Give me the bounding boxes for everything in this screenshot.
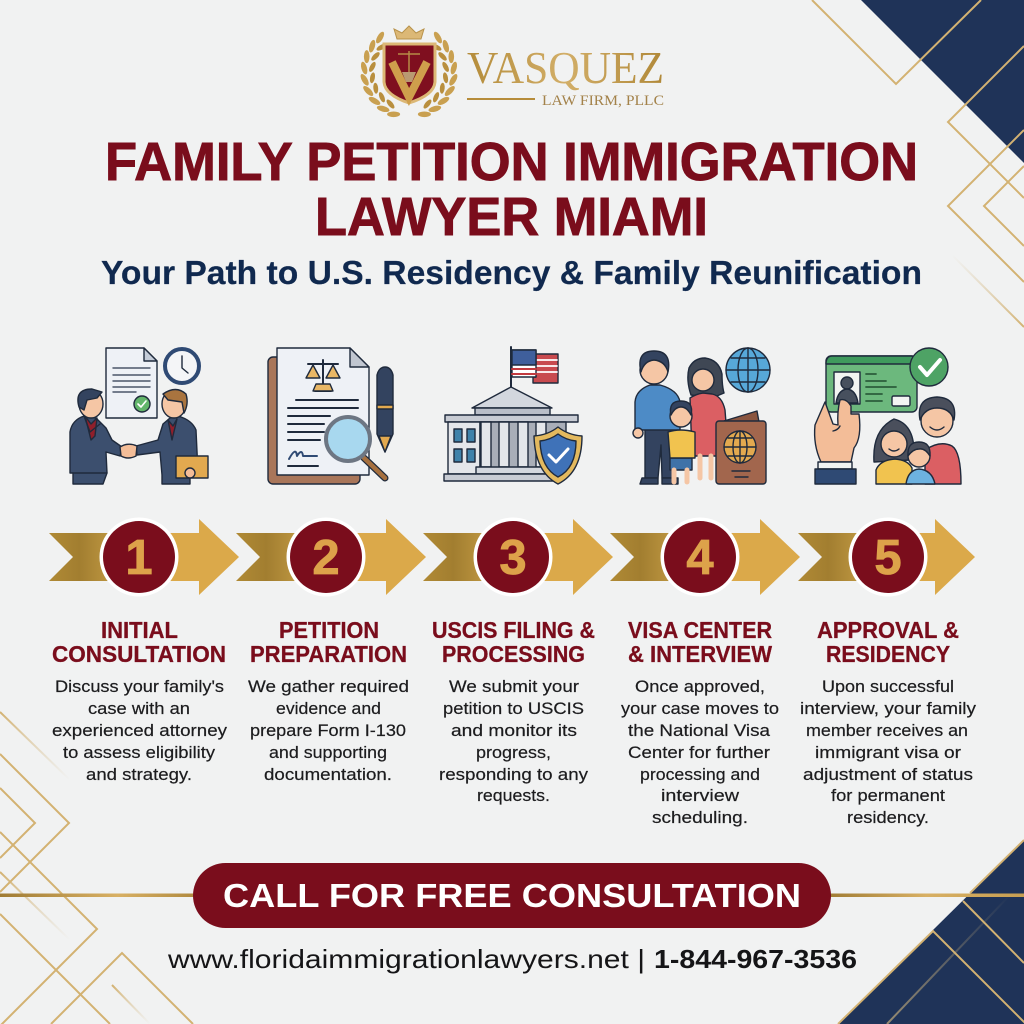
- step 3 arrow: [423, 518, 613, 596]
- step 5 description: Upon successful: [822, 677, 954, 696]
- step 4 description: processing and: [640, 765, 760, 784]
- logo: Vasquez Law Firm: [359, 26, 664, 117]
- step 5 description: residency.: [847, 808, 929, 827]
- step 5 description: [800, 677, 977, 827]
- step 4 description: [621, 677, 779, 827]
- step 1 description: Discuss your family's: [55, 677, 224, 696]
- step 3 description: [439, 677, 589, 805]
- call to action button: [193, 863, 831, 928]
- step 1 arrow: [49, 518, 239, 596]
- step 2 heading: PREPARATION: [250, 641, 407, 667]
- step 4 heading: VISA CENTER: [628, 617, 772, 643]
- step 3 heading: USCIS FILING &: [432, 617, 595, 643]
- step 4 description: Center for further: [628, 743, 770, 762]
- step 3 description: We submit your: [449, 677, 579, 696]
- step 2 description: We gather required: [248, 677, 409, 696]
- step 2 description: and supporting: [269, 743, 387, 762]
- step 3 description: responding to any: [439, 765, 589, 784]
- contact line: www.floridaimmigrationlawyers.net |: [167, 944, 645, 974]
- step 4 heading: & INTERVIEW: [628, 641, 772, 667]
- decoration: bottom-right corner: [828, 840, 1024, 1024]
- step 4 heading: [628, 617, 772, 667]
- step 3 heading: [432, 617, 595, 667]
- decoration: bottom-left corner: [0, 712, 196, 1024]
- step 3 arrow: 3: [499, 531, 527, 585]
- step 5 heading: [817, 617, 959, 667]
- step 4 arrow: 4: [686, 531, 714, 585]
- step 1 heading: CONSULTATION: [52, 641, 226, 667]
- logo wordmark: VASQUEZ: [467, 43, 664, 93]
- subtitle: Your Path to U.S. Residency & Family Reunification: [101, 254, 922, 291]
- icon: petition document: [268, 348, 393, 484]
- icon: family with passport and globe: [633, 348, 770, 484]
- icon: shield: [384, 44, 435, 103]
- icon: government building with shield: [444, 347, 582, 484]
- icon: crown: [394, 26, 424, 39]
- step 2 heading: PETITION: [279, 617, 379, 643]
- decoration: top-right corner: [812, 0, 1024, 327]
- step 5 heading: RESIDENCY: [826, 641, 950, 667]
- title: FAMILY PETITION IMMIGRATION: [105, 132, 918, 192]
- step 1 description: case with an: [88, 699, 190, 718]
- icon: right laurel branch: [418, 30, 459, 117]
- step 5 description: member receives an: [806, 721, 968, 740]
- step 3 description: and monitor its: [451, 721, 577, 740]
- step 3 heading: PROCESSING: [442, 641, 585, 667]
- step 1 heading: INITIAL: [101, 617, 178, 643]
- step 3 description: petition to USCIS: [443, 699, 584, 718]
- step 2 description: [248, 677, 409, 784]
- logo rule: [467, 98, 535, 100]
- icon: left laurel branch: [359, 30, 400, 117]
- contact line: [167, 944, 857, 974]
- logo subtitle: LAW FIRM, PLLC: [542, 93, 664, 109]
- step 1 description: to assess eligibility: [63, 743, 216, 762]
- step 2 arrow: 2: [312, 531, 340, 585]
- contact line: 1-844-967-3536: [654, 944, 857, 974]
- step 1 description: experienced attorney: [52, 721, 228, 740]
- step 5 arrow: [798, 518, 975, 596]
- step 1 text: initial consultation: [52, 617, 228, 784]
- step 2 description: documentation.: [264, 765, 392, 784]
- step 3 description: requests.: [477, 786, 550, 805]
- step 2 heading: [250, 617, 407, 667]
- step 4 description: Once approved,: [635, 677, 765, 696]
- step 5 description: for permanent: [831, 786, 945, 805]
- step 5 arrow: 5: [874, 531, 902, 585]
- step 4 text: visa center and interview: [621, 617, 779, 827]
- step 5 text: approval and residency: [800, 617, 977, 827]
- step 2 arrow: [236, 518, 426, 596]
- step 3 text: USCIS filing and processing: [432, 617, 595, 805]
- icon: green card and happy family: [815, 348, 961, 484]
- step 2 description: prepare Form I-130: [250, 721, 406, 740]
- step 3 description: progress,: [476, 743, 551, 762]
- step 4 arrow: [610, 518, 800, 596]
- title: LAWYER MIAMI: [315, 187, 708, 247]
- step 1 heading: [52, 617, 226, 667]
- call to action button: CALL FOR FREE CONSULTATION: [223, 877, 801, 914]
- step 5 description: adjustment of status: [803, 765, 973, 784]
- step 5 description: interview, your family: [800, 699, 977, 718]
- step 4 description: the National Visa: [628, 721, 771, 740]
- step 5 description: immigrant visa or: [815, 743, 961, 762]
- step 1 arrow: 1: [125, 531, 153, 585]
- step 1 description: and strategy.: [86, 765, 192, 784]
- step 4 description: scheduling.: [652, 808, 748, 827]
- step 4 description: interview: [661, 786, 740, 805]
- step 2 description: evidence and: [276, 699, 381, 718]
- step 4 description: your case moves to: [621, 699, 779, 718]
- step 1 description: [52, 677, 228, 784]
- title: [105, 132, 918, 247]
- step 5 heading: APPROVAL &: [817, 617, 959, 643]
- icon: consultation handshake: [70, 348, 208, 484]
- step 2 text: petition preparation: [248, 617, 409, 784]
